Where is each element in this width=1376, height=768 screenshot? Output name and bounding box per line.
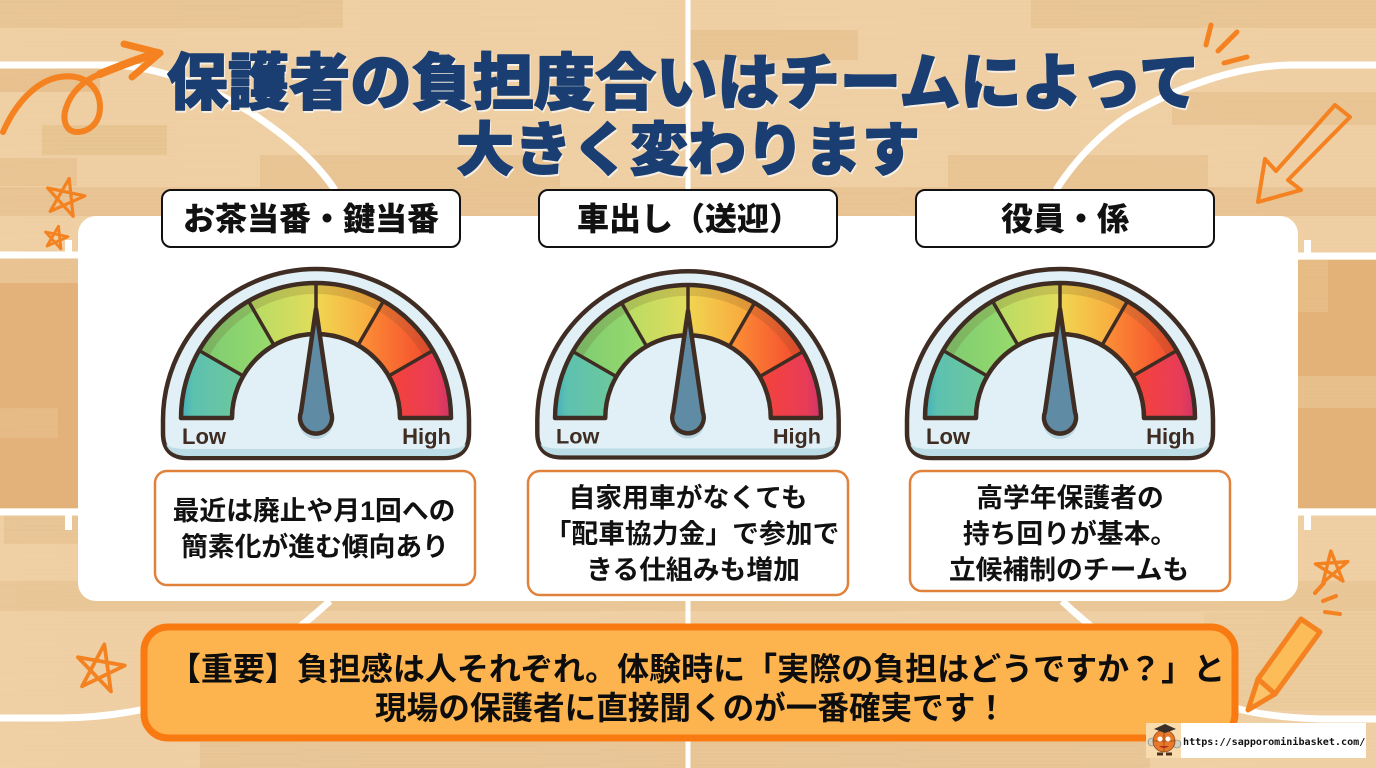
- text box: tea and key duty: [155, 471, 475, 585]
- icon: star right: [1315, 550, 1349, 583]
- gauge: car duty: Low: [556, 424, 599, 449]
- gauge: officers: High: [1146, 424, 1195, 449]
- source badge: [1146, 723, 1366, 758]
- gauge: officers: Low: [926, 424, 971, 449]
- title: 大きく変わります: [456, 118, 920, 183]
- gauge: tea and key duty: [163, 269, 469, 458]
- gauge: tea and key duty: High: [402, 424, 451, 449]
- panel: officers: [907, 190, 1230, 591]
- text box: officers: 高学年保護者の: [976, 483, 1164, 513]
- text box: car duty: きる仕組みも増加: [586, 555, 800, 585]
- icon: star lower left: [73, 640, 128, 693]
- heading: officers: 役員・係: [1001, 201, 1129, 237]
- icon: sparks top right: [1206, 25, 1247, 63]
- heading: tea and key duty: [162, 190, 460, 247]
- panel: car duty: [528, 190, 848, 595]
- icon: star small: [43, 224, 70, 250]
- source badge: https://sapporominibasket.com/: [1183, 736, 1365, 748]
- heading: tea and key duty: お茶当番・鍵当番: [183, 201, 439, 237]
- text box: tea and key duty: 簡素化が進む傾向あり: [181, 531, 449, 562]
- text box: officers: 立候補制のチームも: [949, 555, 1189, 585]
- icon: swirl arrow: [3, 44, 160, 132]
- callout: important note: [144, 627, 1235, 738]
- text box: car duty: [528, 471, 848, 595]
- text box: officers: 持ち回りが基本。: [963, 518, 1177, 549]
- icon: sparks by pencil: [1315, 583, 1340, 614]
- callout: important note: 現場の保護者に直接聞くのが一番確実です！: [375, 690, 1007, 726]
- callout: important note: 【重要】負担感は人それぞれ。体験時に「実際の負担はどうですか？」と: [169, 651, 1225, 687]
- title: [167, 49, 1200, 183]
- icon: outline arrow: [1258, 105, 1350, 202]
- gauge: tea and key duty: Low: [182, 424, 227, 449]
- text box: officers: [910, 471, 1230, 591]
- panel: white card: [78, 216, 1298, 601]
- panel: tea and key duty: [155, 190, 475, 585]
- heading: officers: [916, 190, 1214, 247]
- gauge: car duty: High: [773, 424, 821, 449]
- heading: car duty: 車出し（送迎）: [577, 201, 801, 237]
- icon: mascot: [1148, 724, 1181, 754]
- icon: pencil: [1248, 619, 1320, 710]
- icon: star top: [43, 174, 88, 218]
- title: 保護者の負担度合いはチームによって: [167, 49, 1200, 117]
- heading: car duty: [539, 190, 837, 247]
- text box: tea and key duty: 最近は廃止や月1回への: [173, 496, 455, 526]
- text box: car duty: 自家用車がなくても: [568, 482, 808, 513]
- gauge: officers: [907, 269, 1213, 458]
- text box: car duty: 「配車協力金」で参加で: [545, 519, 839, 549]
- gauge: car duty: [537, 271, 839, 457]
